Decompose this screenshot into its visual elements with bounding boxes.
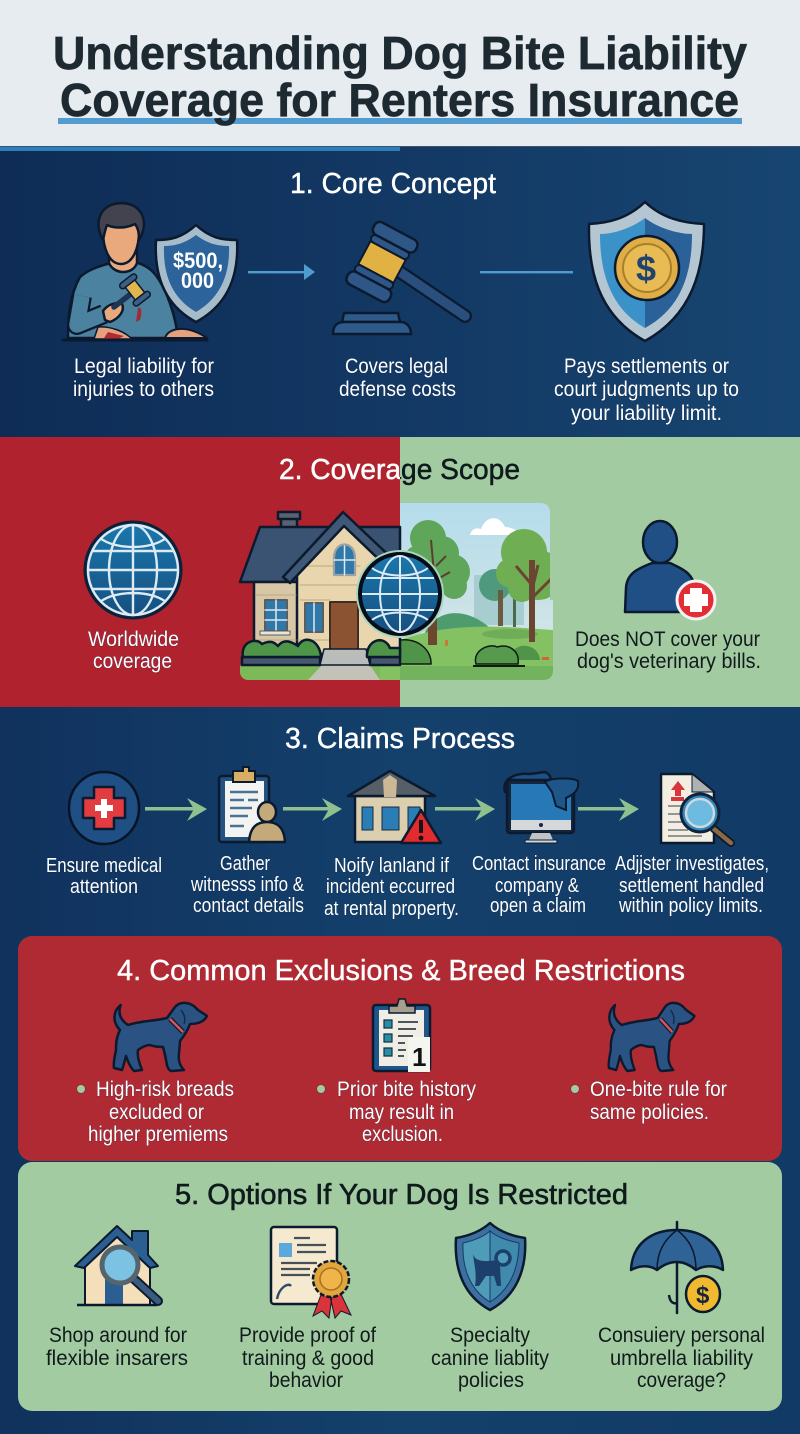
icon: checklist clipboard: 1 xyxy=(412,1042,426,1072)
icon: shield with limit xyxy=(156,225,237,322)
panel: 5 options xyxy=(18,1162,782,1411)
text: prior bites: may result in xyxy=(349,1101,454,1124)
heading: exclusions: 4. Common Exclusions & Breed Restrictions xyxy=(117,955,685,987)
page background xyxy=(0,707,800,1434)
text: step 5: Adjjster investigates, xyxy=(615,853,769,875)
text: proof: training & good xyxy=(242,1347,374,1370)
icon: document and magnifier xyxy=(661,774,731,843)
icon: rental building with warning xyxy=(348,771,441,843)
text: specialty: canine liablity xyxy=(431,1347,549,1370)
arrow xyxy=(578,798,639,821)
text: step 2: Gather xyxy=(220,853,270,875)
text: vet bills: dog's veterinary bills. xyxy=(577,650,761,673)
panel: 2 coverage scope xyxy=(0,437,800,707)
icon: shield with coin xyxy=(589,202,704,341)
text: step 2: witnesss info & xyxy=(190,874,305,896)
text: specialty xyxy=(431,1324,549,1392)
icon: dog shield xyxy=(456,1223,525,1310)
text: worldwide: Worldwide xyxy=(88,628,179,651)
text: settlements xyxy=(554,355,739,425)
icon: gavel xyxy=(333,220,465,334)
text: step 4 xyxy=(472,853,606,917)
text: worldwide xyxy=(88,628,179,673)
illustration: park xyxy=(400,503,563,680)
text: settlements: court judgments up to xyxy=(554,378,739,401)
text: proof: Provide proof of xyxy=(239,1324,376,1347)
heading: claims process: 3. Claims Process xyxy=(285,723,515,755)
panel: 4 exclusions xyxy=(18,936,782,1161)
arrow xyxy=(145,798,207,821)
text: step 3: incident eccurred xyxy=(326,876,455,898)
text: umbrella xyxy=(598,1324,765,1392)
illustration: house xyxy=(240,512,400,680)
icon: medical cross xyxy=(69,772,139,844)
icon: shield with limit: 000 xyxy=(181,268,214,293)
text: one-bite xyxy=(571,1078,727,1124)
text: settlements: Pays settlements or xyxy=(564,355,729,378)
text: one-bite: One-bite rule for xyxy=(590,1078,727,1101)
panel: 3 claims process xyxy=(46,723,769,920)
text: breeds: High-risk breads xyxy=(96,1078,234,1101)
text: step 4: Contact insurance xyxy=(472,853,606,875)
icon: dog xyxy=(114,1003,207,1071)
text: breeds xyxy=(77,1078,234,1146)
text: step 4: company & xyxy=(495,875,580,897)
icon: dog xyxy=(609,1003,694,1071)
icon: computer xyxy=(504,772,578,843)
text: proof: behavior xyxy=(269,1369,343,1392)
text: step 2 xyxy=(190,853,305,917)
icon: shield with limit: $500, xyxy=(173,248,223,273)
icon: globe xyxy=(85,522,181,618)
text: step 4: open a claim xyxy=(490,895,586,917)
text: prior bites: exclusion. xyxy=(362,1123,443,1146)
icon: person with medical badge xyxy=(625,521,715,619)
icon: checklist clipboard xyxy=(373,999,430,1072)
text: shop around: Shop around for xyxy=(49,1324,187,1347)
text: specialty: Specialty xyxy=(450,1324,530,1347)
text: step 3 xyxy=(324,855,459,920)
heading: core concept: 1. Core Concept xyxy=(290,168,496,200)
text: shop around xyxy=(46,1324,188,1370)
text: step 5: settlement handled xyxy=(619,875,764,897)
text: step 5 xyxy=(615,853,769,917)
text: one-bite: same policies. xyxy=(590,1101,709,1124)
text: step 3: Noify lanland if xyxy=(334,855,449,877)
text: step 1: Ensure medical xyxy=(46,855,162,877)
text: umbrella: Consuiery personal xyxy=(598,1324,765,1347)
text: umbrella: umbrella liability xyxy=(610,1347,753,1370)
text: step 2: contact details xyxy=(193,895,304,917)
text: step 5: within policy limits. xyxy=(618,895,763,917)
text: step 3: at rental property. xyxy=(324,898,459,920)
text: umbrella: coverage? xyxy=(637,1369,726,1392)
title: Understanding Dog Bite Liability xyxy=(53,27,747,79)
text: worldwide: coverage xyxy=(93,650,172,673)
text: legal defense: Covers legal xyxy=(345,355,448,378)
heading: options: 5. Options If Your Dog Is Restricted xyxy=(175,1179,628,1211)
heading: coverage scope: 2. Coverage Scope xyxy=(279,454,520,486)
text: liability: Legal liability for xyxy=(74,355,214,378)
text: proof xyxy=(239,1324,376,1392)
text: vet bills xyxy=(575,628,761,673)
icon: umbrella: $ xyxy=(696,1282,710,1309)
text: settlements: your liability limit. xyxy=(571,402,722,425)
heading: coverage scope: 2. Coverage Scope xyxy=(279,454,520,486)
text: prior bites: Prior bite history xyxy=(337,1078,476,1101)
title xyxy=(53,27,747,126)
icon: certificate xyxy=(271,1227,351,1318)
connector line xyxy=(480,271,573,273)
arrow xyxy=(283,798,342,821)
text: breeds: higher premiems xyxy=(88,1123,228,1146)
title: Coverage for Renters Insurance xyxy=(60,74,739,126)
text: prior bites xyxy=(317,1078,476,1146)
text: step 1: attention xyxy=(70,876,138,898)
text: legal defense: defense costs xyxy=(339,378,456,401)
icon: clipboard and witness xyxy=(219,767,285,842)
icon: umbrella xyxy=(631,1222,723,1313)
text: vet bills: Does NOT cover your xyxy=(575,628,760,651)
icon: center globe xyxy=(356,550,444,638)
icon: person with gavel xyxy=(63,203,207,340)
text: specialty: policies xyxy=(458,1369,524,1392)
icon: shield with coin: $ xyxy=(636,248,656,289)
text: step 1 xyxy=(46,855,162,898)
text: legal defense xyxy=(339,355,456,401)
arrow: person to gavel xyxy=(248,264,315,280)
text: liability: injuries to others xyxy=(73,378,214,401)
header band xyxy=(0,0,800,148)
text: liability xyxy=(73,355,214,401)
text: shop around: flexible insarers xyxy=(46,1347,188,1370)
text: breeds: excluded or xyxy=(109,1101,204,1124)
arrow xyxy=(435,798,495,821)
panel: 1 core concept xyxy=(0,147,800,437)
icon: house search xyxy=(75,1226,158,1305)
